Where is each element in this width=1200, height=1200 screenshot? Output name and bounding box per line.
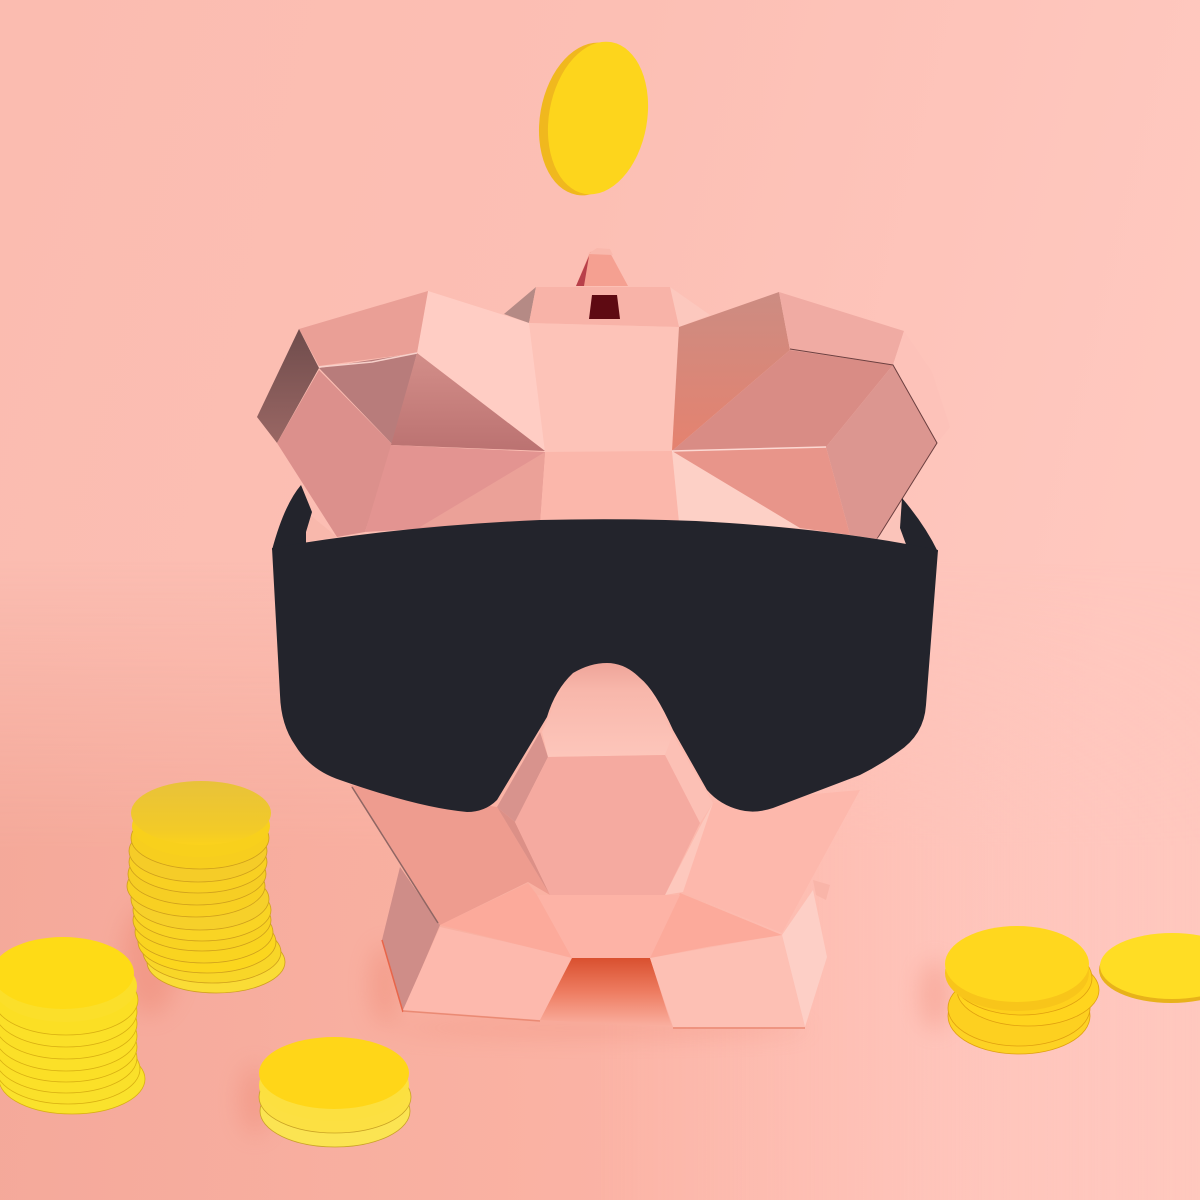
tail (576, 248, 628, 286)
floor shadows (122, 905, 949, 1135)
coin stack: front center (259, 1037, 411, 1147)
coin stack: tall back (127, 781, 285, 993)
right foot side (782, 890, 827, 1027)
single coin: right edge (1099, 933, 1200, 1003)
left strap (272, 485, 337, 550)
mask band (272, 519, 938, 812)
shadow under belly (540, 958, 672, 1027)
head top with coin slot (504, 287, 710, 327)
snout sides (497, 732, 548, 822)
coin stack: right (945, 926, 1099, 1054)
chin facets (440, 883, 572, 958)
right foot (650, 935, 805, 1027)
blindfold (272, 485, 938, 812)
left foot (403, 927, 572, 1020)
right jowl (665, 790, 860, 933)
right strap (877, 498, 938, 552)
right ear (672, 292, 950, 539)
left foot side (382, 867, 440, 1012)
jowls and snout (350, 655, 860, 1028)
head center (529, 323, 800, 528)
left jowl (350, 785, 550, 925)
snout top (542, 655, 673, 757)
snout front (515, 755, 700, 895)
falling coin (527, 34, 660, 204)
piggy bank (257, 248, 950, 1028)
left ear (257, 291, 545, 537)
coin stack: front left (0, 937, 145, 1114)
